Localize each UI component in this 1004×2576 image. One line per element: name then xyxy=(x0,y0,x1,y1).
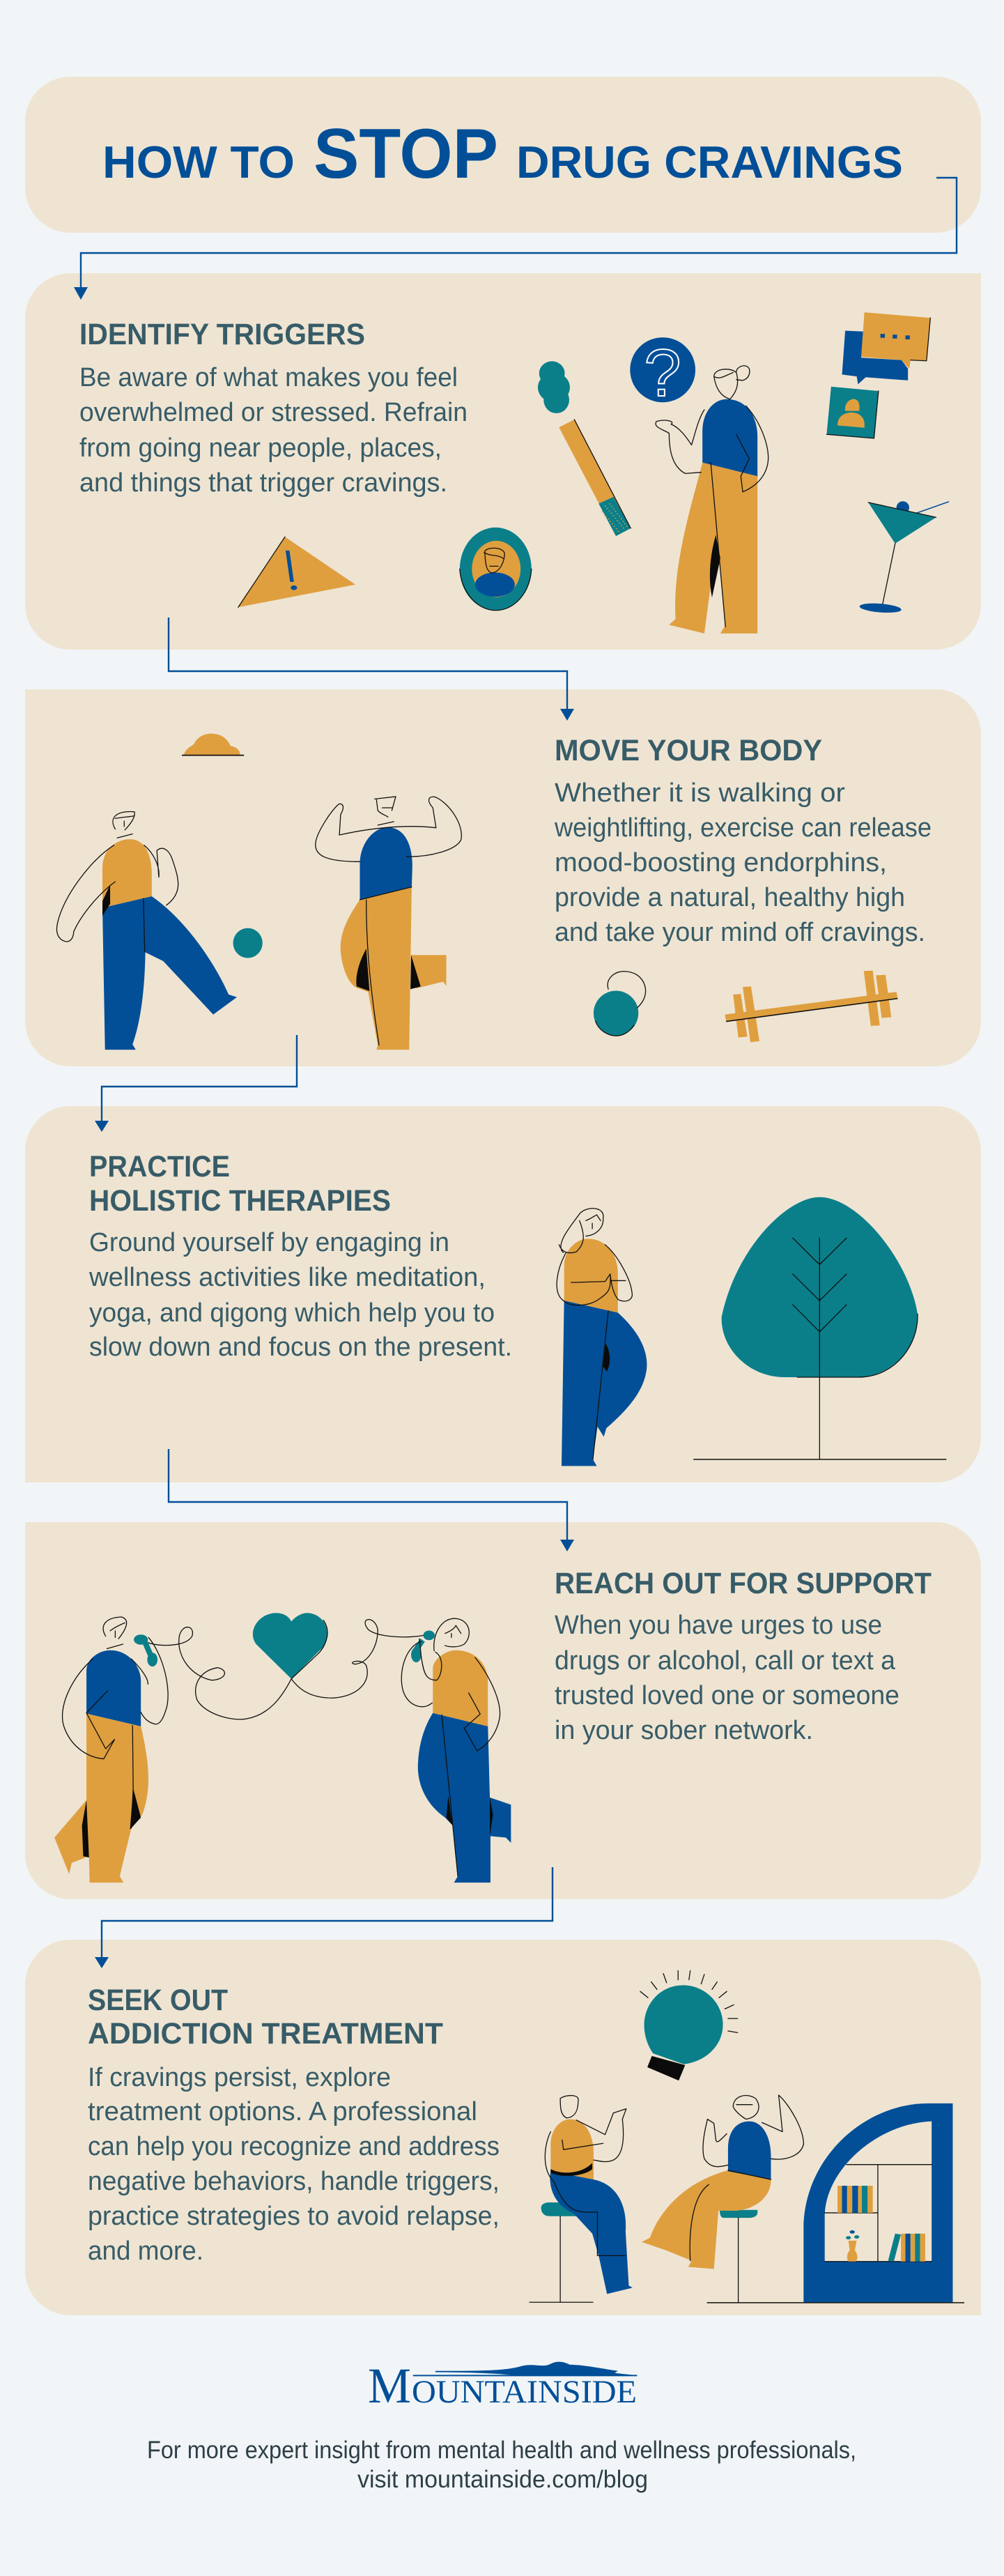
text block: seek out addiction treatment: If cravings persist, explore xyxy=(88,2063,391,2092)
text block: move your body: MOVE YOUR BODY xyxy=(555,734,822,767)
text block: reach out for support: When you have urges to use xyxy=(555,1611,882,1640)
footer text xyxy=(147,2437,856,2493)
illustration: holistic therapies xyxy=(557,1197,946,1466)
icon: speech bubbles xyxy=(842,312,930,384)
text block: practice holistic therapies: wellness activities like meditation, xyxy=(88,1263,486,1292)
arrow: step 3 to step 4 xyxy=(169,1449,574,1551)
text block: identify triggers: and things that trigger cravings. xyxy=(79,468,447,498)
arrow: title to step 1 xyxy=(74,178,957,300)
text block: move your body: provide a natural, healthy high xyxy=(555,883,905,912)
text block: seek out addiction treatment: and more. xyxy=(88,2237,203,2266)
illustration: reach out for support xyxy=(54,1613,511,1883)
arrow: step 2 to step 3 xyxy=(95,1035,297,1132)
arrow: step 1 to step 2 xyxy=(169,618,574,721)
text block: practice holistic therapies: HOLISTIC THERAPIES xyxy=(89,1184,391,1218)
icon: question mark: ? xyxy=(644,336,681,411)
footer text: visit mountainside.com/blog xyxy=(357,2466,648,2493)
panel: identify triggers xyxy=(25,273,981,650)
icon: ball xyxy=(233,928,263,958)
icon: hill xyxy=(182,734,244,756)
icon: tree xyxy=(693,1197,946,1459)
panel: title banner xyxy=(25,77,981,233)
logo: Mountainside: M xyxy=(368,2358,411,2414)
text block: reach out for support xyxy=(555,1567,932,1745)
text block: practice holistic therapies: Ground yourself by engaging in xyxy=(89,1228,449,1257)
text block: identify triggers: IDENTIFY TRIGGERS xyxy=(79,318,365,351)
figure: man on phone xyxy=(54,1617,168,1883)
footer text: For more expert insight from mental health and wellness professionals, xyxy=(147,2437,856,2464)
title: HOW TO xyxy=(102,137,295,187)
text block: seek out addiction treatment: ADDICTION TREATMENT xyxy=(88,2017,443,2050)
text block: practice holistic therapies: slow down and focus on the present. xyxy=(89,1333,512,1362)
text block: identify triggers: Be aware of what makes you feel xyxy=(79,363,458,392)
text block: move your body: weightlifting, exercise can release xyxy=(554,813,932,843)
text block: seek out addiction treatment: treatment options. A professional xyxy=(88,2097,477,2126)
icon: cigarette xyxy=(559,420,631,536)
text block: seek out addiction treatment: practice strategies to avoid relapse, xyxy=(88,2202,500,2231)
text block: practice holistic therapies: yoga, and qigong which help you to xyxy=(89,1298,495,1328)
text block: identify triggers xyxy=(79,318,468,498)
illustration: addiction treatment xyxy=(530,1970,964,2303)
text block: reach out for support: in your sober network. xyxy=(555,1716,813,1745)
text block: seek out addiction treatment: negative behaviors, handle triggers, xyxy=(88,2167,500,2196)
panel: seek out addiction treatment xyxy=(25,1940,981,2315)
icon: warning triangle xyxy=(238,537,355,607)
text block: move your body xyxy=(554,734,932,947)
panel: practice holistic therapies xyxy=(25,1106,981,1482)
icon: light bulb xyxy=(640,1970,738,2080)
figure: standing woman xyxy=(656,366,769,634)
icon: martini glass xyxy=(858,501,949,614)
figure: man lifting arms xyxy=(316,797,461,1050)
logo: Mountainside: OUNTAINSIDE xyxy=(412,2374,637,2410)
text block: seek out addiction treatment xyxy=(88,1984,500,2266)
figure: woman on phone xyxy=(401,1618,511,1883)
illustration: move your body xyxy=(56,734,897,1050)
illustration: identify triggers xyxy=(238,312,949,634)
panel: reach out for support xyxy=(25,1522,981,1899)
text block: reach out for support: REACH OUT FOR SUPPORT xyxy=(555,1567,932,1600)
icon: phone cord and heart xyxy=(148,1613,426,1719)
text block: practice holistic therapies: PRACTICE xyxy=(89,1150,230,1183)
text block: seek out addiction treatment: SEEK OUT xyxy=(88,1984,228,2017)
text block: move your body: and take your mind off cravings. xyxy=(555,918,925,947)
icon: barbell xyxy=(725,970,897,1042)
text block: move your body: Whether it is walking or xyxy=(555,779,845,808)
text block: reach out for support: trusted loved one or someone xyxy=(555,1681,899,1710)
icon: arched bookcase xyxy=(803,2103,952,2302)
icon: kettlebell xyxy=(594,972,646,1036)
figure: woman in tree pose xyxy=(557,1209,647,1466)
text block: reach out for support: drugs or alcohol, call or text a xyxy=(555,1646,896,1676)
title: DRUG CRAVINGS xyxy=(516,137,903,187)
text block: identify triggers: overwhelmed or stressed. Refrain xyxy=(79,398,468,427)
figure: seated client xyxy=(642,2095,803,2302)
title: STOP xyxy=(314,115,498,193)
figure: man kicking ball xyxy=(56,812,237,1050)
text block: move your body: mood-boosting endorphins, xyxy=(555,848,887,877)
text block: practice holistic therapies xyxy=(88,1150,512,1362)
arrow: step 4 to step 5 xyxy=(95,1867,553,1968)
text block: seek out addiction treatment: can help you recognize and address xyxy=(88,2132,500,2161)
text block: identify triggers: from going near people, places, xyxy=(79,434,442,463)
logo: Mountainside xyxy=(368,2358,637,2414)
icon: contact card xyxy=(826,387,879,438)
panel: move your body xyxy=(25,689,981,1066)
icon: smoke xyxy=(538,361,570,413)
icon: portrait badge xyxy=(460,528,532,611)
figure: seated therapist xyxy=(530,2096,633,2302)
icon: question bubble xyxy=(630,337,695,402)
title xyxy=(102,115,903,193)
